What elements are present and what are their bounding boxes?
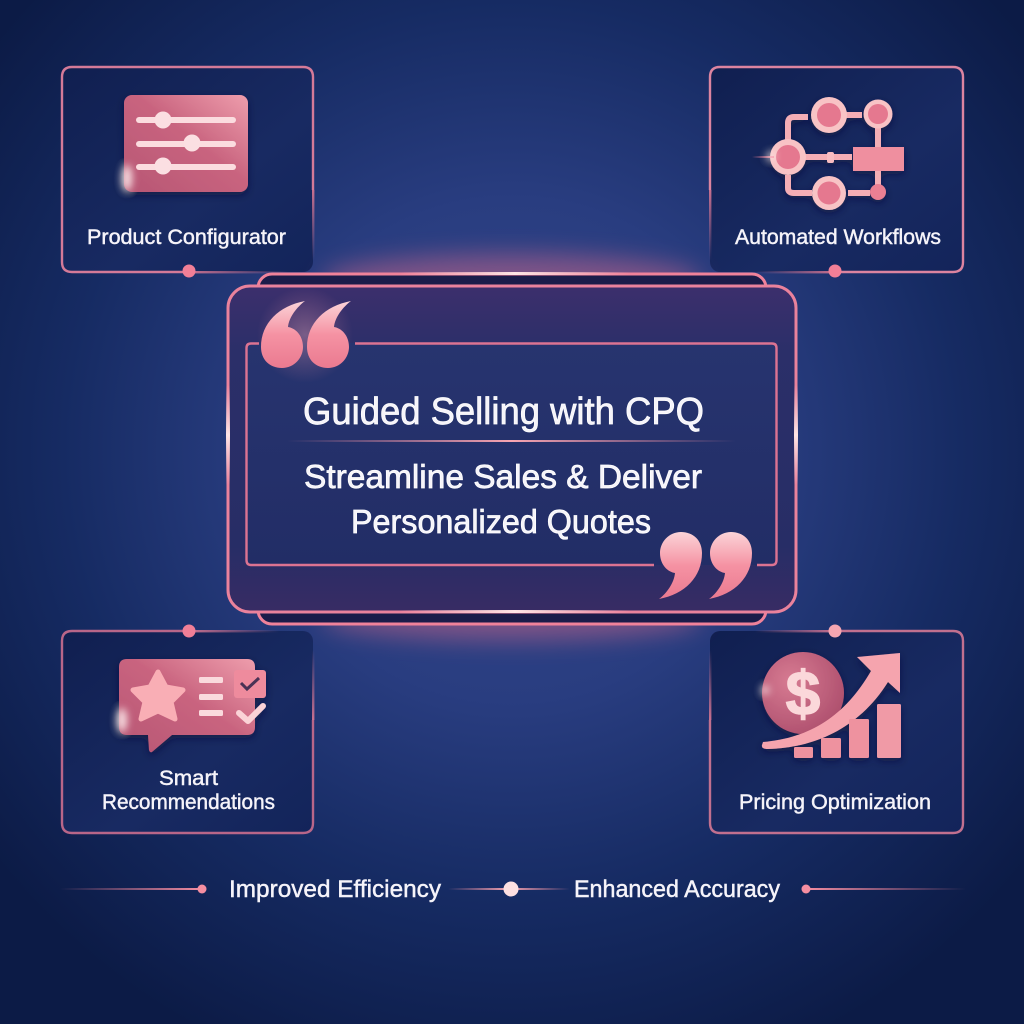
subtitle line one: Streamline Sales & Deliver [304,458,702,495]
label: automated workflows: Automated Workflows [735,226,941,249]
label: smart recommendations: Smart [159,767,218,790]
icon: sliders [122,95,248,192]
benefit: improved efficiency: Improved Efficiency [229,876,441,903]
connector dot [828,264,842,278]
divider [287,440,736,442]
subtitle line two: Personalized Quotes [351,503,651,540]
panel: smart recommendations [62,624,314,833]
icon: closing quote [659,532,752,599]
inner frame [246,343,777,565]
icon: pricing growth: $ [786,660,820,729]
label: pricing optimization: Pricing Optimization [739,791,931,814]
panel: pricing optimization [709,624,963,833]
label: product configurator: Product Configurator [87,226,286,249]
benefit: enhanced accuracy: Enhanced Accuracy [574,876,780,903]
title: Guided Selling with CPQ [303,391,704,433]
footer benefits strip [60,876,966,903]
middle connector [448,882,570,896]
connector dot [828,624,842,638]
connector dot [182,264,196,278]
glow accents [226,272,798,613]
panel: product configurator [62,67,314,278]
icon: pricing growth [761,652,901,758]
left connector [60,884,206,894]
right connector [802,884,966,894]
icon: workflow diagram [752,97,904,210]
connector dot [182,624,196,638]
icon: opening quote [257,287,353,383]
panel: automated workflows [709,67,963,278]
label line two: Recommendations [102,791,275,814]
icon: star speech bubble [117,659,266,752]
panel: central quote [226,254,798,640]
